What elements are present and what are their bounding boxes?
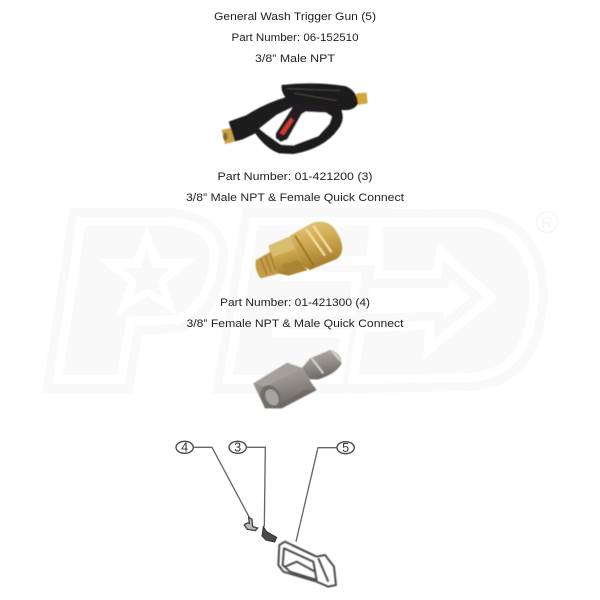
- watermark logo: [63, 212, 558, 375]
- part number: female quick connect: Part Number: 01-421200 (3): [218, 171, 372, 183]
- callout 3: 3: [234, 441, 241, 455]
- description: male quick connect: 3/8” Female NPT & Male Quick Connect: [186, 318, 404, 330]
- callout 5: [296, 441, 354, 542]
- part 3 drawing: [262, 527, 277, 542]
- parts diagram: [176, 441, 354, 587]
- title: General Wash Trigger Gun (5): [214, 11, 376, 23]
- part number: male quick connect: Part Number: 01-421300 (4): [220, 297, 370, 309]
- callout 3: [229, 441, 265, 527]
- description: female quick connect: 3/8” Male NPT & Female Quick Connect: [186, 192, 404, 204]
- photo: trigger gun: [222, 83, 368, 154]
- callout 5: 5: [342, 441, 349, 455]
- thread size: trigger gun: 3/8” Male NPT: [255, 53, 335, 65]
- photo: steel quick connect: [253, 350, 342, 412]
- watermark logo: R: [541, 215, 553, 232]
- part 4 drawing: [244, 517, 258, 531]
- part number: trigger gun: Part Number: 06-152510: [232, 32, 358, 44]
- part 5 drawing: trigger gun outline: [278, 542, 336, 587]
- callout 4: 4: [181, 441, 188, 455]
- photo: brass quick connect: [256, 222, 342, 278]
- callout 4: [176, 441, 249, 517]
